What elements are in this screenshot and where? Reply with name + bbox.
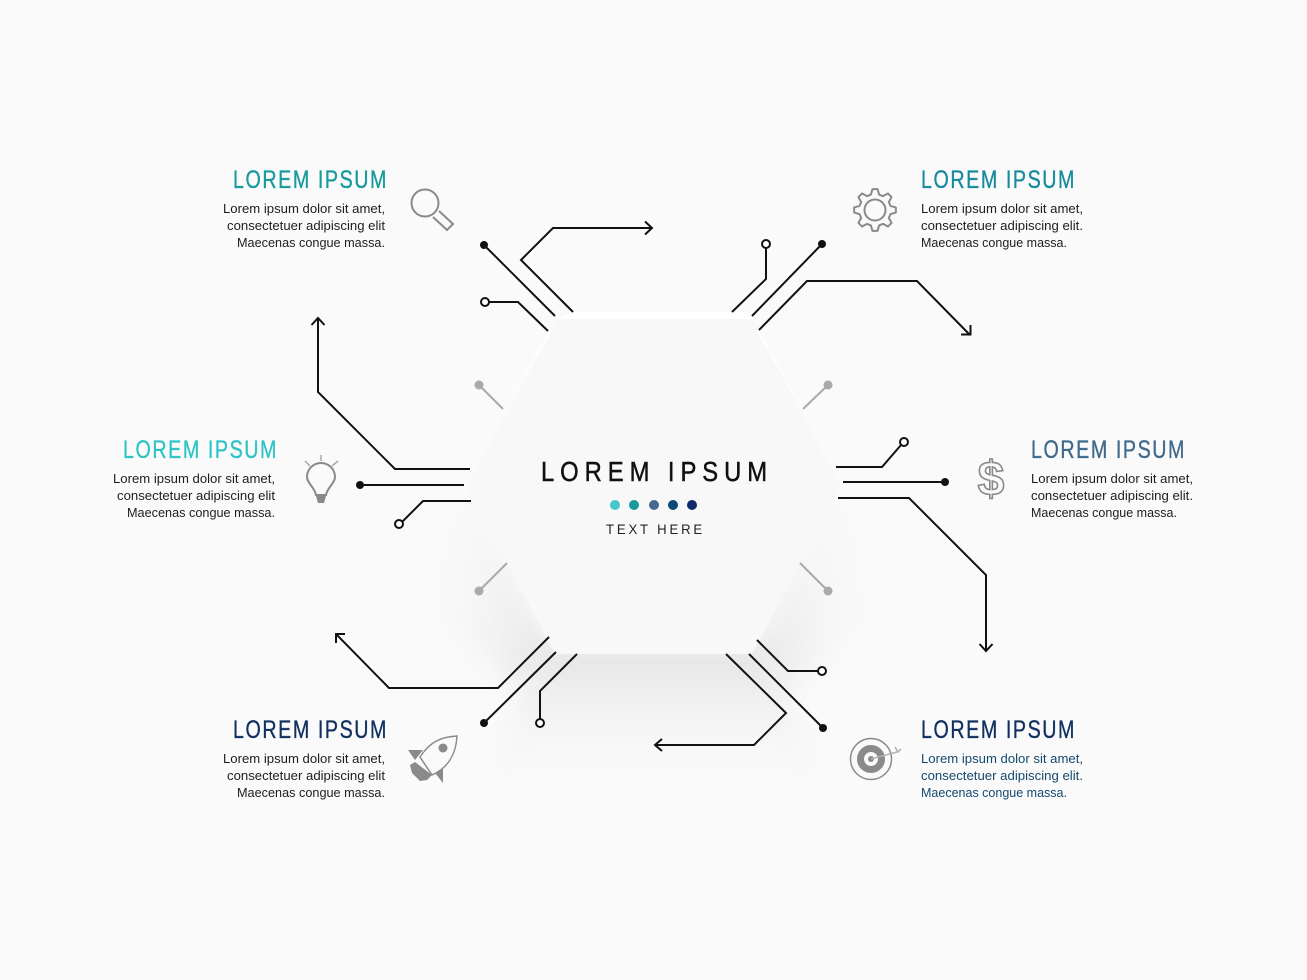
text block: bottom right: Maecenas congue massa. <box>921 785 1067 800</box>
text block: middle right: consectetuer adipiscing elit. <box>1031 488 1193 503</box>
text block: bottom right <box>921 716 1083 800</box>
circuit: middle left <box>312 318 471 528</box>
icon: dollar sign: $ <box>978 453 1005 506</box>
text block: middle left: Lorem ipsum dolor sit amet, <box>113 471 275 486</box>
colour dots <box>610 500 697 510</box>
text block: bottom left: Lorem ipsum dolor sit amet, <box>223 751 385 766</box>
circuit: bottom left <box>336 634 577 727</box>
text block: top right: LOREM IPSUM <box>921 166 1076 194</box>
icon: light bulb <box>305 455 338 503</box>
text block: bottom left: consectetuer adipiscing elit <box>227 768 385 783</box>
text block: top right: consectetuer adipiscing elit. <box>921 218 1083 233</box>
text block: middle right: LOREM IPSUM <box>1031 436 1186 464</box>
circuit: top left <box>480 222 652 331</box>
text block: bottom right: consectetuer adipiscing elit. <box>921 768 1083 783</box>
text block: top right: Maecenas congue massa. <box>921 235 1067 250</box>
text block: middle left <box>113 436 278 520</box>
central title: LOREM IPSUM <box>541 456 773 487</box>
circuit: bottom right <box>655 640 827 751</box>
hexagon shadow <box>415 490 885 800</box>
text block: middle left: Maecenas congue massa. <box>127 505 275 520</box>
text block: bottom left: LOREM IPSUM <box>233 716 388 744</box>
text block: top right <box>921 166 1083 250</box>
text block: bottom right: Lorem ipsum dolor sit amet, <box>921 751 1083 766</box>
text block: top left: LOREM IPSUM <box>233 166 388 194</box>
icon: gear <box>854 189 896 231</box>
circuit: middle right <box>836 438 992 651</box>
text block: bottom left: Maecenas congue massa. <box>237 785 385 800</box>
text block: middle left: LOREM IPSUM <box>123 436 278 464</box>
subtitle: TEXT HERE <box>606 521 705 537</box>
text block: bottom right: LOREM IPSUM <box>921 716 1076 744</box>
text block: top left: Lorem ipsum dolor sit amet, <box>223 201 385 216</box>
text block: top left: consectetuer adipiscing elit <box>227 218 385 233</box>
text block: top right: Lorem ipsum dolor sit amet, <box>921 201 1083 216</box>
grey connector pins <box>474 380 832 596</box>
text block: top left <box>223 166 388 250</box>
text block: middle left: consectetuer adipiscing elit <box>117 488 275 503</box>
icon: magnifying glass <box>412 190 453 230</box>
central title <box>541 456 773 537</box>
text block: middle right <box>1031 436 1193 520</box>
text block: top left: Maecenas congue massa. <box>237 235 385 250</box>
text block: bottom left <box>223 716 388 800</box>
central hexagon <box>467 312 840 654</box>
text block: middle right: Lorem ipsum dolor sit amet, <box>1031 471 1193 486</box>
text block: middle right: Maecenas congue massa. <box>1031 505 1177 520</box>
circuit: top right <box>732 240 970 335</box>
icon: target with arrow <box>850 738 901 780</box>
icon: rocket <box>408 736 457 783</box>
